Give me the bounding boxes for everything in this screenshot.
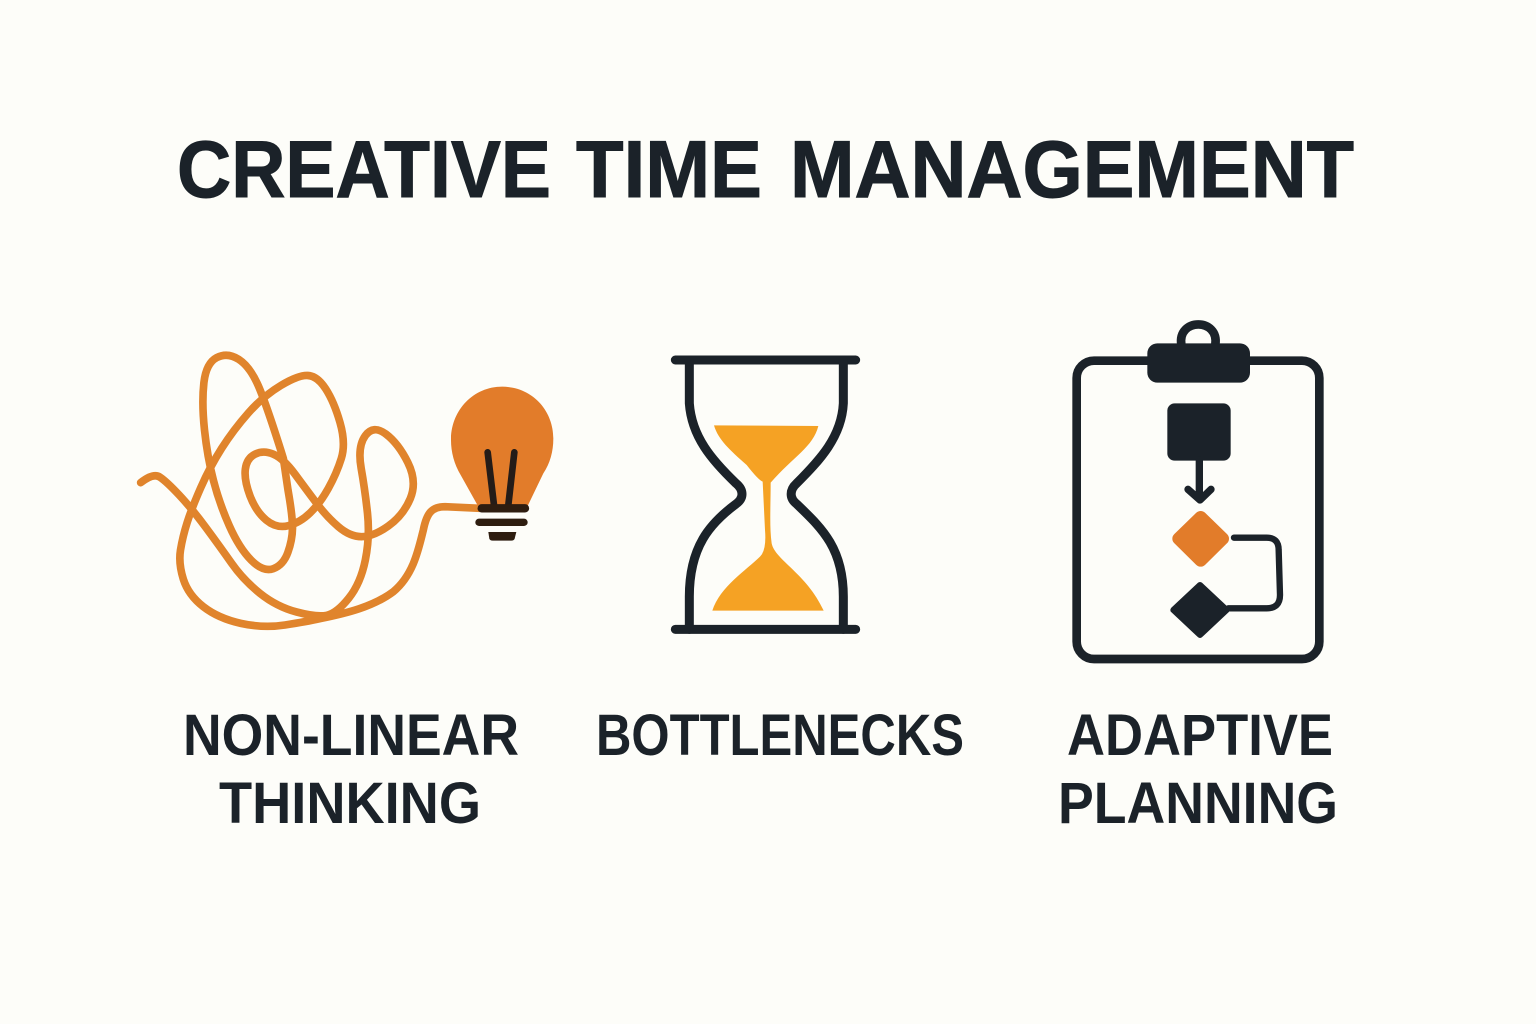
label: non-linear thinking: THINKING bbox=[219, 771, 481, 836]
hourglass frame bbox=[675, 360, 856, 629]
label: adaptive planning bbox=[1058, 703, 1338, 836]
label: bottlenecks: BOTTLENECKS bbox=[596, 703, 964, 768]
label: adaptive planning: PLANNING bbox=[1058, 771, 1338, 836]
flowchart start square bbox=[1167, 403, 1231, 461]
clipboard board bbox=[1077, 361, 1319, 659]
icon: clipboard with flowchart bbox=[1077, 324, 1319, 659]
dark decision diamond bbox=[1173, 585, 1227, 635]
flowchart connector bbox=[1228, 538, 1280, 608]
light bulb bbox=[451, 387, 553, 541]
label: adaptive planning: ADAPTIVE bbox=[1067, 703, 1333, 768]
icon: hourglass bbox=[675, 360, 856, 629]
label: non-linear thinking: NON-LINEAR bbox=[183, 703, 519, 768]
sand bbox=[712, 425, 824, 611]
flowchart arrow bbox=[1188, 460, 1211, 500]
label: non-linear thinking bbox=[183, 703, 519, 836]
title: MANAGEMENT bbox=[790, 125, 1354, 215]
orange decision diamond bbox=[1179, 517, 1223, 560]
title: CREATIVE bbox=[177, 125, 551, 215]
tangled line bbox=[141, 355, 480, 626]
icon: tangled line leading to light bulb bbox=[141, 355, 553, 626]
title bbox=[177, 125, 1354, 215]
title: TIME bbox=[576, 125, 762, 215]
clipboard clip bbox=[1147, 324, 1250, 383]
